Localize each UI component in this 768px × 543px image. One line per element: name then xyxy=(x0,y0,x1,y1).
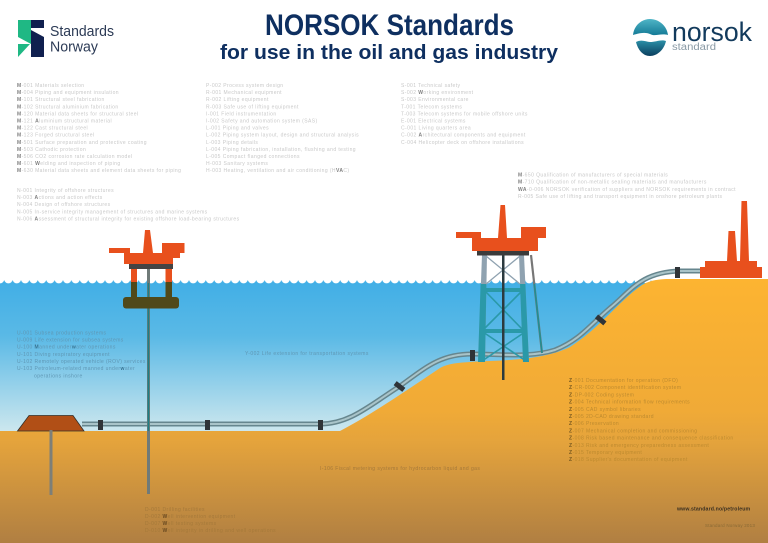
text block: subsea standards: U-101 Diving respiratory equipment xyxy=(17,352,110,358)
title: NORSOK Standards xyxy=(265,9,514,42)
label: life extension for transportation systems: Y-002 Life extension for transportation systems xyxy=(245,351,369,357)
subsea manifold xyxy=(18,416,84,495)
text block: documentation standards: Z-018 Supplier's documentation of equipment xyxy=(569,457,688,463)
text block: safety, telecom, electrical standards: E-001 Electrical systems xyxy=(401,118,466,124)
text block: process, piping and HVAC standards: R-002 Lifting equipment xyxy=(206,97,269,103)
text block: process, piping and HVAC standards: H-003 Sanitary systems xyxy=(206,161,268,167)
text block: structural standards xyxy=(17,188,240,222)
text block: process, piping and HVAC standards: P-002 Process system design xyxy=(206,83,283,89)
text block: subsea standards: U-102 Remotely operated vehicle (ROV) services xyxy=(17,359,146,365)
text block: materials standards: M-123 Forged structural steel xyxy=(17,133,94,139)
text block: safety, telecom, electrical standards: T-001 Telecom systems xyxy=(401,104,462,110)
text block: process, piping and HVAC standards: I-002 Safety and automation system (SAS) xyxy=(206,118,318,124)
floating platform xyxy=(109,230,184,494)
text block: safety, telecom, electrical standards xyxy=(401,83,528,146)
text block: qualification standards: R-005 Safe use of lifting and transport equipment in onshore petroleum plants xyxy=(518,194,722,200)
text block: materials standards: M-120 Material data sheets for structural steel xyxy=(17,111,138,117)
text block: qualification standards: M-650 Qualification of manufacturers of special materials xyxy=(518,172,668,178)
text block: process, piping and HVAC standards: R-001 Mechanical equipment xyxy=(206,90,282,96)
logo: Standards Norway xyxy=(18,20,114,57)
text block: drilling standards: D-010 Well integrity in drilling and well operations xyxy=(145,528,276,534)
text block: documentation standards: Z-005 CAD symbol libraries xyxy=(569,407,641,413)
text block: structural standards: N-004 Design of offshore structures xyxy=(17,202,111,208)
text block: qualification standards: WA-0-006 NORSOK verification of suppliers and NORSOK requirements in contract xyxy=(518,187,736,193)
text block: process, piping and HVAC standards: H-003 Heating, ventilation and air conditioning (HVAC) xyxy=(206,168,350,174)
text block: safety, telecom, electrical standards: C-001 Living quarters area xyxy=(401,126,471,132)
copyright: Standard Norway 2013 xyxy=(705,523,755,528)
website: www.standard.no/petroleum xyxy=(676,506,751,512)
pipeline clamps xyxy=(98,267,680,430)
text block: documentation standards: Z-007 Mechanical completion and commissioning xyxy=(569,428,697,434)
logo: norsok standard xyxy=(633,17,752,56)
text block: safety, telecom, electrical standards: S-001 Technical safety xyxy=(401,83,461,89)
text block: process, piping and HVAC standards: L-005 Compact flanged connections xyxy=(206,154,300,160)
text block: documentation standards: Z-013 Risk and emergency preparedness assessment xyxy=(569,443,709,449)
text block: structural standards: N-005 In-service integrity management of structures and marine systems xyxy=(17,209,208,215)
text block: documentation standards: Z-001 Documentation for operation (DFO) xyxy=(569,378,678,384)
text block: drilling standards: D-002 Well intervention equipment xyxy=(145,514,236,520)
text block: documentation standards: Z-004 Technical information flow requirements xyxy=(569,400,690,406)
seabed and hill xyxy=(0,279,768,543)
text block: materials standards: M-001 Materials selection xyxy=(17,83,84,89)
text block: qualification standards: M-710 Qualification of non-metallic sealing materials and manufacturers xyxy=(518,180,707,186)
text block: qualification standards xyxy=(518,172,736,200)
text block: subsea standards xyxy=(17,330,146,379)
text block: drilling standards: D-001 Drilling facilities xyxy=(145,507,205,513)
logo: Standards Norway: Standards xyxy=(50,23,114,40)
text block: process, piping and HVAC standards xyxy=(206,83,359,174)
text block: process, piping and HVAC standards: R-003 Safe use of lifting equipment xyxy=(206,104,299,110)
text block: process, piping and HVAC standards: L-001 Piping and valves xyxy=(206,126,269,132)
text block: materials standards: M-121 Aluminium structural material xyxy=(17,118,112,124)
text block: safety, telecom, electrical standards: C-004 Helicopter deck on offshore installations xyxy=(401,140,524,146)
text block: subsea standards: U-009 Life extension for subsea systems xyxy=(17,338,124,344)
text block: documentation standards: Z-DP-002 Coding system xyxy=(569,392,634,398)
text block: materials standards: M-102 Structural aluminium fabrication xyxy=(17,104,119,110)
text block: drilling standards: D-007 Well testing systems xyxy=(145,521,217,527)
text block: structural standards: N-006 Assessment of structural integrity for existing offshore load-bearing structures xyxy=(17,216,240,222)
text block: documentation standards: Z-008 Risk based maintenance and consequence classification xyxy=(569,436,734,442)
text block: materials standards: M-122 Cast structural steel xyxy=(17,126,88,132)
onshore plant xyxy=(700,201,762,278)
text block: documentation standards: Z-CR-002 Component identification system xyxy=(569,385,681,391)
text block: materials standards: M-630 Material data sheets and element data sheets for piping xyxy=(17,168,181,174)
text block: documentation standards: Z-005 2D-CAD drawing standard xyxy=(569,414,654,420)
text block: materials standards: M-506 CO2 corrosion rate calculation model xyxy=(17,154,132,160)
text block: process, piping and HVAC standards: L-003 Piping details xyxy=(206,140,258,146)
text block: materials standards: M-501 Surface preparation and protective coating xyxy=(17,140,147,146)
label: fiscal metering systems: I-106 Fiscal metering systems for hydrocarbon liquid and gas xyxy=(320,466,480,472)
text block: structural standards: N-003 Actions and action effects xyxy=(17,195,103,201)
text block: materials standards: M-601 Welding and inspection of piping xyxy=(17,161,121,167)
text block: subsea standards: U-103 Petroleum-related manned underwater xyxy=(17,366,135,372)
text block: documentation standards: Z-015 Temporary equipment xyxy=(569,450,642,456)
text block: process, piping and HVAC standards: L-004 Piping fabrication, installation, flushing and testing xyxy=(206,147,356,153)
text block: subsea standards: U-001 Subsea production systems xyxy=(17,330,107,336)
pipeline xyxy=(82,267,702,430)
text block: materials standards: M-004 Piping and equipment insulation xyxy=(17,90,119,96)
text block: materials standards: M-101 Structural steel fabrication xyxy=(17,97,105,103)
text block: safety, telecom, electrical standards: S-003 Environmental care xyxy=(401,97,469,103)
jacket platform xyxy=(456,205,546,380)
text block: structural standards: N-001 Integrity of offshore structures xyxy=(17,188,114,194)
subtitle: for use in the oil and gas industry xyxy=(220,42,559,64)
sea xyxy=(0,277,768,434)
text block: process, piping and HVAC standards: I-001 Field instrumentation xyxy=(206,111,277,117)
logo: Standards Norway: Norway xyxy=(50,38,98,56)
text block: drilling standards xyxy=(145,507,276,534)
logo: norsok standard: norsok xyxy=(672,17,752,47)
text block: subsea standards: U-100 Manned underwater operations xyxy=(17,345,116,351)
text block: safety, telecom, electrical standards: C-002 Architectural components and equipment xyxy=(401,133,526,139)
text block: documentation standards xyxy=(569,378,734,463)
text block: safety, telecom, electrical standards: S-002 Working environment xyxy=(401,90,474,96)
text block: subsea standards: operations inshore xyxy=(34,373,83,379)
text block: materials standards: M-503 Cathodic protection xyxy=(17,147,86,153)
text block: materials standards xyxy=(17,83,181,174)
logo: norsok standard: standard xyxy=(672,42,716,53)
text block: safety, telecom, electrical standards: T-003 Telecom systems for mobile offshore units xyxy=(401,111,528,117)
text block: process, piping and HVAC standards: L-002 Piping system layout, design and structural analysis xyxy=(206,133,359,139)
text block: documentation standards: Z-006 Preservation xyxy=(569,421,619,427)
